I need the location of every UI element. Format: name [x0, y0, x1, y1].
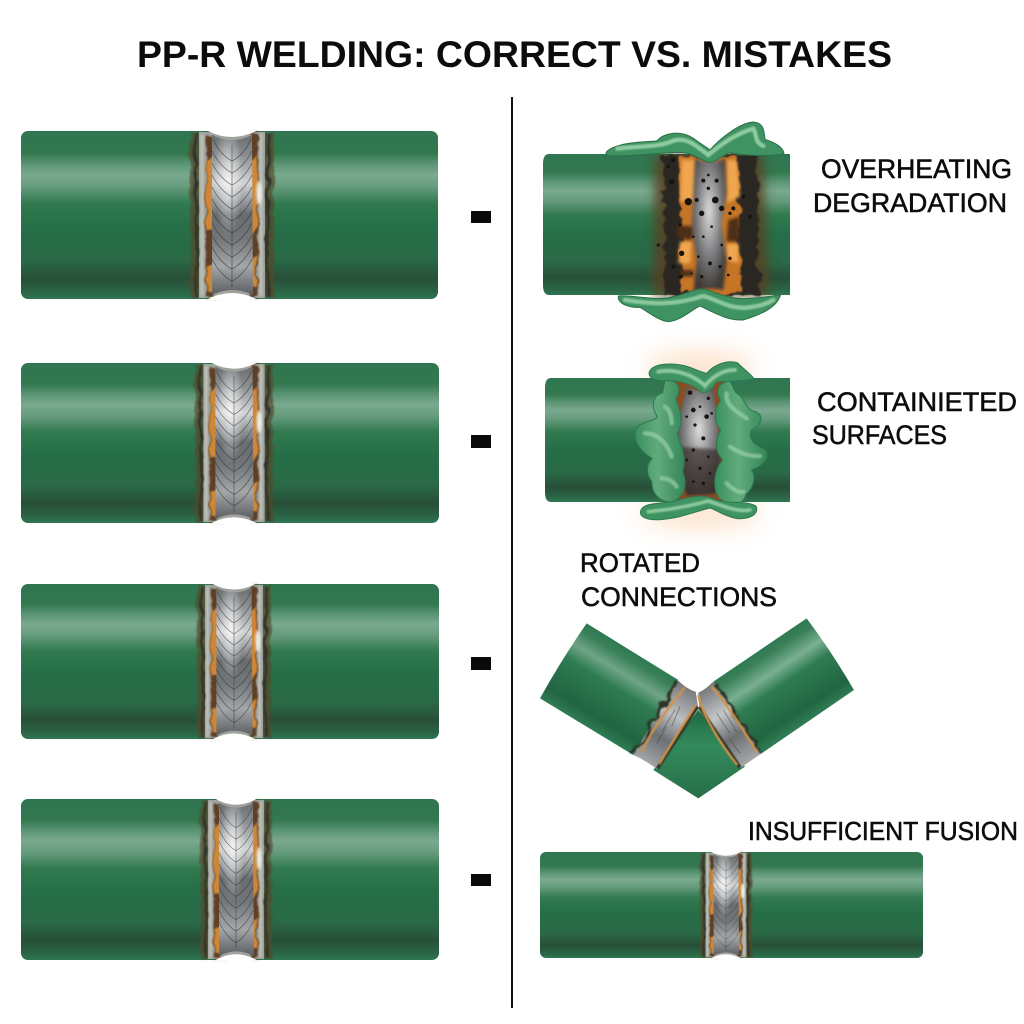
contaminated pipe — [545, 378, 790, 502]
overheated pipe — [543, 154, 790, 295]
contaminated melt right — [715, 381, 767, 504]
panel: correct weld 4 — [21, 798, 491, 961]
panel: rotated connections — [540, 548, 854, 798]
dash marker — [471, 211, 491, 223]
weld bead — [197, 583, 271, 740]
label: CONNECTIONS — [581, 582, 777, 612]
weld bead — [200, 798, 272, 961]
panel: correct weld 3 — [21, 583, 491, 740]
weld bead — [195, 362, 273, 524]
panel: insufficient fusion — [540, 816, 1018, 959]
title: PP-R WELDING: CORRECT VS. MISTAKES — [137, 34, 892, 75]
label: DEGRADATION — [813, 188, 1007, 218]
label: SURFACES — [812, 420, 947, 450]
dash marker — [471, 874, 491, 886]
bottom melt bead — [618, 289, 781, 322]
top melt bead — [606, 122, 784, 162]
right pipe arm — [713, 618, 854, 753]
label: OVERHEATING — [821, 154, 1012, 184]
contaminated melt bottom — [640, 496, 757, 520]
label — [812, 387, 1017, 450]
pipe body — [21, 584, 439, 739]
left pipe arm — [540, 623, 678, 755]
center divider — [511, 97, 513, 1008]
elbow base — [653, 710, 745, 798]
contaminated melt top — [649, 362, 754, 393]
thin pipe — [540, 852, 923, 958]
weld bead — [190, 130, 274, 300]
right weld band — [698, 682, 762, 768]
angled pipe joint — [540, 618, 854, 798]
weak weld bead — [700, 851, 752, 959]
panel: contaminated surfaces — [545, 355, 1017, 525]
left weld band — [633, 681, 698, 769]
contaminated melt left — [635, 381, 685, 502]
pipe body — [21, 131, 438, 299]
burnt weld zone — [653, 155, 768, 296]
label — [580, 548, 777, 612]
orange heat glow — [640, 355, 760, 525]
panel: correct weld 2 — [21, 362, 491, 524]
dash marker — [471, 435, 491, 448]
label: CONTAINIETED — [817, 387, 1017, 417]
pipe body — [21, 799, 439, 960]
dash marker — [471, 657, 491, 670]
label: ROTATED — [580, 548, 700, 578]
pipe body — [21, 363, 439, 523]
panel: correct weld 1 — [21, 130, 491, 300]
label: INSUFFICIENT FUSION — [748, 816, 1018, 846]
panel: overheating degradation — [543, 122, 1012, 322]
label — [813, 154, 1012, 218]
exposed dirty core — [675, 380, 730, 505]
